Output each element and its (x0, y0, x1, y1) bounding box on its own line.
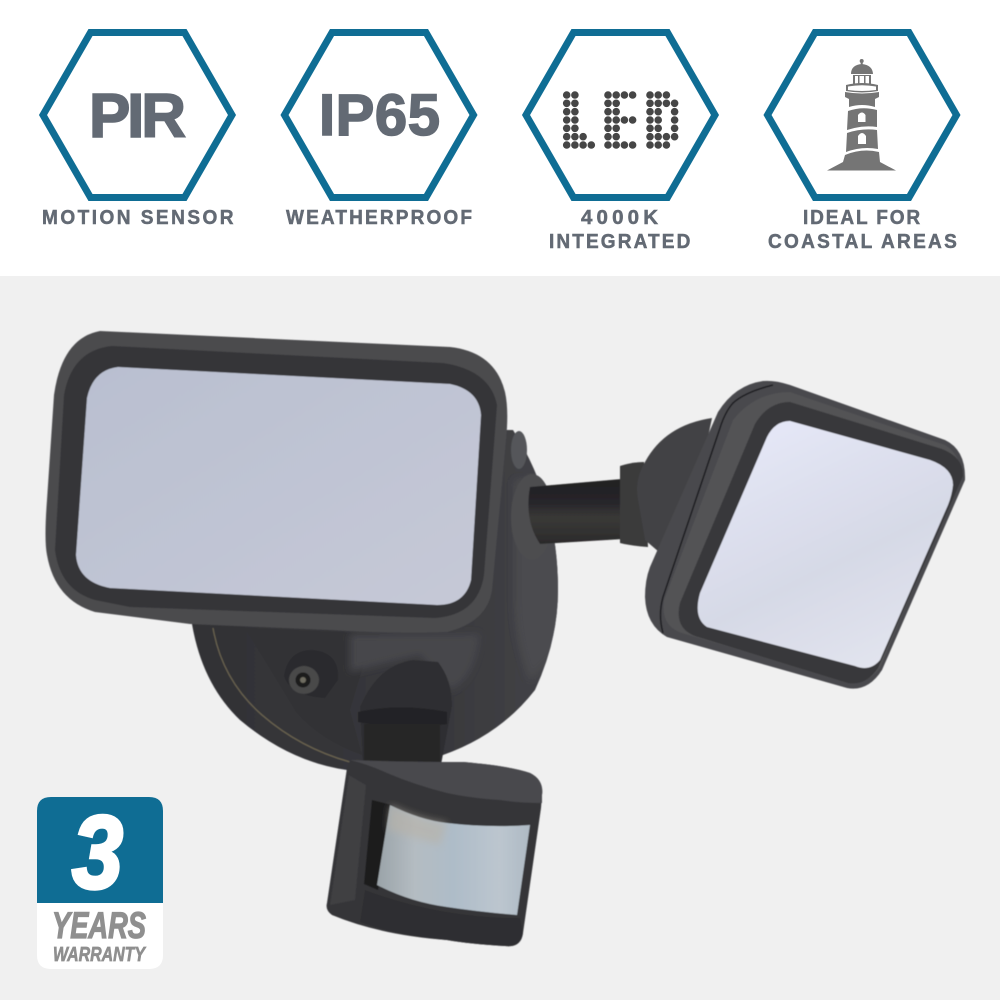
arm to right head (511, 462, 648, 560)
right lens (698, 421, 953, 668)
feature: PIR motion sensor (42, 32, 234, 229)
warranty badge (37, 795, 163, 969)
motion sensor neck (358, 660, 452, 770)
IP65 heading: IP65 (319, 83, 440, 148)
sensor top face (350, 760, 542, 803)
badge blue top (37, 797, 163, 903)
right head hood (637, 418, 712, 570)
motion sensor housing (327, 760, 542, 946)
feature: ideal for coastal areas (768, 32, 957, 253)
sensor side highlight (330, 775, 366, 905)
feature: 4000K integrated LED (526, 32, 715, 253)
label: weatherproof: WEATHERPROOF (286, 206, 472, 229)
label: coastal areas: COASTAL AREAS (768, 230, 957, 253)
sensor lens warm tint (388, 805, 447, 845)
base highlights (348, 544, 558, 687)
sensor lower band (360, 890, 523, 946)
wall base plate (190, 430, 570, 770)
label: ideal for: IDEAL FOR (803, 206, 920, 229)
sensor frame shadow (364, 800, 392, 890)
header band (0, 0, 1000, 276)
LED dot-matrix lettering: LED (566, 84, 680, 160)
label: motion sensor: MOTION SENSOR (42, 206, 234, 229)
feature: IP65 weatherproof (284, 32, 474, 229)
swivel knob (511, 431, 527, 469)
icon: lighthouse (827, 59, 896, 170)
right head (645, 381, 965, 689)
warranty label: WARRANTY (53, 944, 146, 966)
years label: YEARS (52, 905, 146, 946)
product photo: twin-head floodlight (46, 331, 965, 946)
left head (46, 331, 507, 633)
left lens (76, 367, 481, 605)
label: integrated: INTEGRATED (549, 230, 690, 253)
label: 4000K: 4000K (581, 206, 658, 229)
warranty number: 3 (72, 795, 123, 911)
badge white bottom (37, 903, 163, 969)
sensor lens (377, 805, 530, 915)
PIR heading: PIR (89, 82, 186, 151)
cable gland (284, 650, 338, 698)
product background panel (0, 276, 1000, 1000)
